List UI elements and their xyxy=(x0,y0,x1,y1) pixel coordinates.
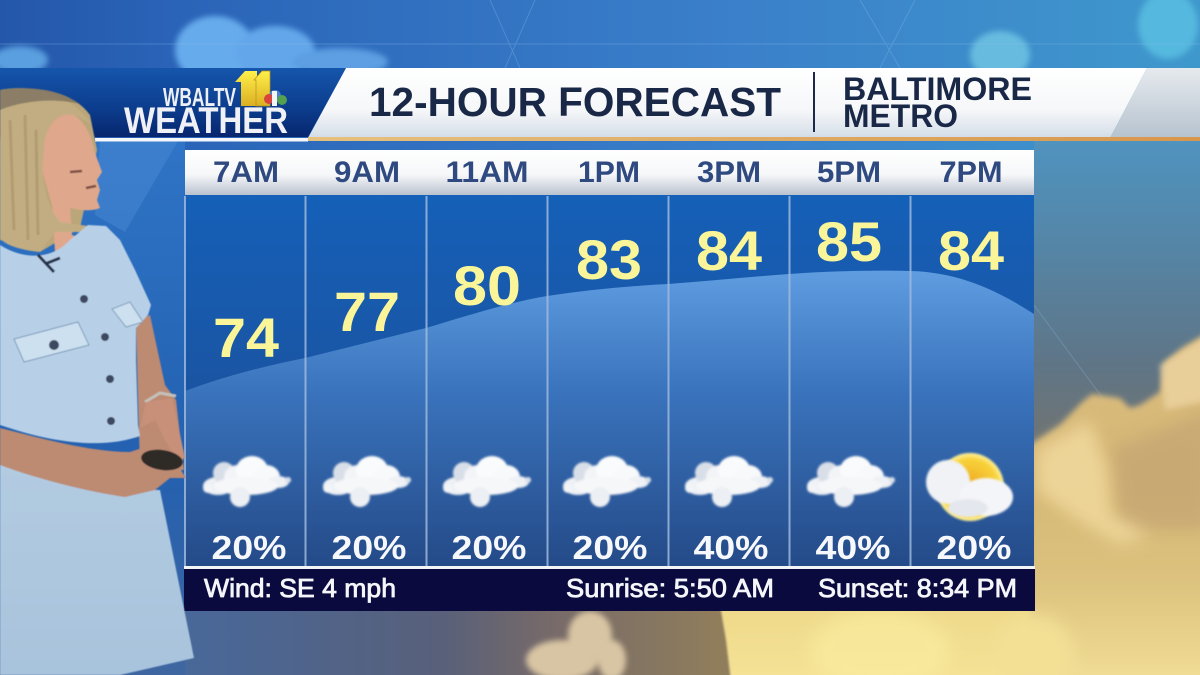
right storm cloud xyxy=(1030,328,1200,675)
hair shadow top xyxy=(0,88,80,110)
buttons xyxy=(49,295,115,425)
title banner xyxy=(0,68,1200,142)
icon: cloud 3PM xyxy=(685,456,773,507)
logo: WEATHER: WEATHER xyxy=(124,100,288,141)
location xyxy=(843,71,1032,134)
hand xyxy=(140,398,185,462)
column header strip: 5PM xyxy=(817,156,881,189)
temperatures: 83 xyxy=(576,228,642,291)
dress top xyxy=(0,225,151,443)
dress skirt xyxy=(0,445,194,675)
precipitation chances: 20% xyxy=(452,529,526,566)
footer bar: Sunset: 8:34 PM xyxy=(818,573,1017,603)
column header strip: 11AM xyxy=(446,156,528,189)
hair streaks xyxy=(10,115,38,240)
column header strip: 7PM xyxy=(940,156,1002,189)
precipitation chances xyxy=(212,529,1012,566)
face and neck xyxy=(42,110,102,252)
temperatures: 74 xyxy=(213,306,279,369)
panel backing xyxy=(185,195,1034,567)
icon: cloud 1PM xyxy=(563,456,651,507)
temperature curve area xyxy=(185,271,1034,567)
temperatures xyxy=(213,210,1004,369)
logo: WBALTV: WBALTV xyxy=(163,82,236,112)
temperatures: 85 xyxy=(816,210,882,273)
precipitation chances: 20% xyxy=(212,529,286,566)
watch xyxy=(145,393,176,402)
forecast panel xyxy=(184,150,1035,611)
icon: partly sunny 7PM xyxy=(926,453,1013,521)
temperatures: 84 xyxy=(938,219,1004,282)
precipitation chances: 20% xyxy=(936,529,1012,566)
icon: cloud 11AM xyxy=(443,456,531,507)
hair front xyxy=(0,88,92,252)
logo block xyxy=(0,68,346,142)
forearm and hand xyxy=(0,428,186,497)
precipitation chances: 40% xyxy=(816,529,890,566)
title: 12-HOUR FORECAST xyxy=(369,79,781,125)
temperatures: 77 xyxy=(334,280,400,343)
pocket flap right xyxy=(112,302,143,327)
column header strip: 3PM xyxy=(697,156,761,189)
column header strip xyxy=(185,150,1034,195)
footer bar: Sunrise: 5:50 AM xyxy=(566,573,774,603)
precipitation chances: 40% xyxy=(694,529,768,566)
footer bar: Wind: SE 4 mph xyxy=(204,573,396,603)
top clouds xyxy=(0,0,1198,84)
icon: cloud 9AM xyxy=(323,456,411,507)
presenter xyxy=(0,88,194,675)
location: BALTIMORE xyxy=(843,71,1032,107)
pocket flap left xyxy=(14,322,89,362)
microphone xyxy=(38,255,60,272)
column header strip: 9AM xyxy=(334,156,400,189)
thin light lines xyxy=(0,0,1200,530)
upper arm xyxy=(136,315,184,470)
hair back xyxy=(0,88,97,252)
icon: cloud 5PM xyxy=(807,456,895,507)
precipitation chances: 20% xyxy=(572,529,648,566)
logo: channel 11 xyxy=(235,71,287,106)
facial features xyxy=(70,171,96,188)
precipitation chances: 20% xyxy=(332,529,406,566)
temperatures: 84 xyxy=(696,219,762,282)
footer bar xyxy=(184,566,1035,611)
column header strip: 7AM xyxy=(213,156,279,189)
temperatures: 80 xyxy=(453,254,521,317)
icon: cloud 7AM xyxy=(203,456,291,507)
remote xyxy=(140,447,184,473)
bottom clouds xyxy=(720,605,1070,675)
column header strip: 1PM xyxy=(578,156,640,189)
location: METRO xyxy=(843,98,958,134)
